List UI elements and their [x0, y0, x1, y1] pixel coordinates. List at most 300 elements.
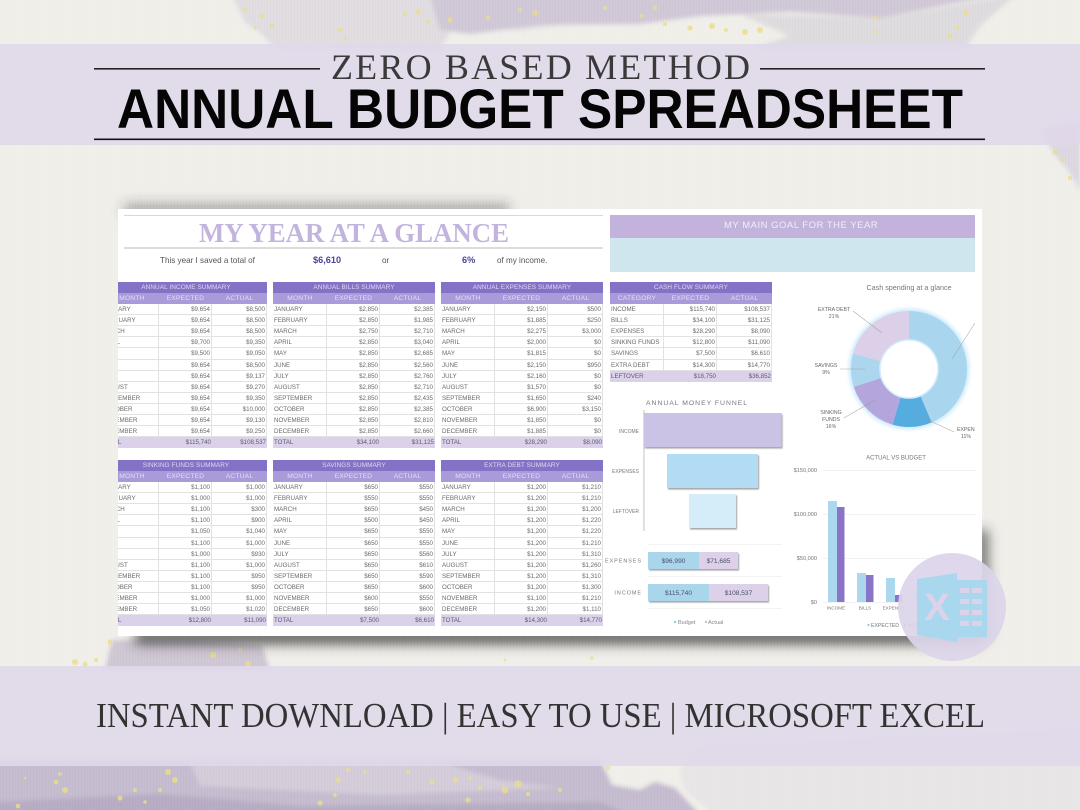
table: sinking funds summary: $930	[251, 551, 265, 558]
table: extra debt summary: FEBRUARY	[442, 495, 476, 502]
subtitle rule right	[760, 68, 985, 70]
table: annual expenses summary: $500	[587, 306, 601, 313]
table: annual expenses summary: EXPECTED	[503, 295, 540, 302]
table: extra debt summary: SEPTEMBER	[442, 573, 480, 580]
stacked bars: income and expenses, budget vs actual	[605, 544, 782, 626]
table: annual income summary: EXPECTED	[167, 295, 204, 302]
table: cash flow summary: $14,770	[748, 362, 770, 369]
table: annual bills summary: SEPTEMBER	[274, 395, 312, 402]
legend: budget and actual: Actual	[708, 620, 723, 626]
table: annual expenses summary: APRIL	[442, 339, 460, 346]
table: extra debt summary: MAY	[442, 528, 455, 535]
table: sinking funds summary: ACTUAL	[226, 473, 253, 480]
table: annual expenses summary: ACTUAL	[562, 295, 589, 302]
table: annual expenses summary: $3,000	[582, 328, 601, 335]
table: cash flow summary: EXTRA DEBT	[611, 362, 650, 369]
table: annual expenses summary: $0	[594, 339, 601, 346]
table: cash flow summary: BILLS	[611, 317, 628, 324]
table: annual expenses summary: $1,815	[527, 350, 546, 357]
donut title: Cash spending at a glance	[866, 283, 952, 292]
table: extra debt summary: JANUARY	[442, 484, 471, 491]
table: savings summary: $650	[364, 562, 378, 569]
table: annual income summary: $9,654	[191, 428, 210, 435]
table: savings summary: MONTH	[287, 473, 313, 480]
table: annual bills summary: $2,850	[359, 362, 378, 369]
stacked bars: income and expenses, budget vs actual: $71,685	[707, 558, 731, 565]
table: annual expenses summary: AUGUST	[442, 384, 468, 391]
donut chart: cash spending at a glance: 16%	[826, 424, 837, 430]
title rule bottom	[94, 138, 985, 140]
table: extra debt summary: ACTUAL	[562, 473, 589, 480]
table: cash flow summary: INCOME	[611, 306, 636, 313]
table: annual bills summary: APRIL	[274, 339, 292, 346]
table: sinking funds summary: $1,000	[191, 495, 210, 502]
table: extra debt summary: $1,200	[582, 506, 601, 513]
table: sinking funds summary: $1,100	[191, 562, 210, 569]
table: sinking funds summary: $1,100	[191, 540, 210, 547]
table: annual bills summary: JUNE	[274, 362, 290, 369]
table: annual expenses summary: $1,650	[527, 395, 546, 402]
table: cash flow summary: $11,090	[748, 339, 770, 346]
table: annual bills summary: ACTUAL	[394, 295, 421, 302]
table: annual income summary	[118, 282, 267, 448]
table: sinking funds summary: $1,100	[191, 584, 210, 591]
table: extra debt summary: $1,200	[527, 562, 546, 569]
stacked bars: income and expenses, budget vs actual: $115,740	[665, 590, 692, 597]
legend: expected and actual: EXPECTED	[871, 623, 899, 629]
table: annual expenses summary: $0	[594, 384, 601, 391]
table: annual bills summary: $2,850	[359, 417, 378, 424]
table: cash flow summary: $31,125	[748, 317, 770, 324]
table: annual bills summary: $2,435	[414, 395, 433, 402]
table: savings summary: $7,500	[360, 617, 379, 624]
table: savings summary: MARCH	[274, 506, 297, 513]
table: cash flow summary: $108,537	[744, 306, 770, 313]
table: extra debt summary: $1,200	[527, 584, 546, 591]
table: annual expenses summary: $28,290	[525, 439, 547, 446]
table: extra debt summary: JUNE	[442, 540, 458, 547]
table: savings summary: $560	[419, 551, 433, 558]
table: sinking funds summary: $12,800	[189, 617, 211, 624]
table: sinking funds summary: $1,050	[191, 606, 210, 613]
main goal panel: MY MAIN GOAL FOR THE YEAR	[724, 220, 878, 231]
donut chart: cash spending at a glance: 9%	[822, 370, 830, 376]
main goal panel	[610, 215, 975, 272]
bar chart: actual vs budget: $50,000	[797, 556, 817, 562]
table: annual bills summary: JANUARY	[274, 306, 303, 313]
table: savings summary: $450	[419, 517, 433, 524]
table: sinking funds summary: $1,100	[191, 484, 210, 491]
table: savings summary: $550	[364, 495, 378, 502]
table: annual expenses summary: $0	[594, 373, 601, 380]
table: savings summary: $650	[364, 551, 378, 558]
table: annual bills summary: $2,750	[359, 328, 378, 335]
table: annual expenses summary: JULY	[442, 373, 457, 380]
legend: budget and actual: Budget	[678, 620, 696, 626]
table: savings summary: $650	[364, 573, 378, 580]
table: extra debt summary: $1,200	[527, 517, 546, 524]
table: cash flow summary: EXPECTED	[672, 295, 709, 302]
table: savings summary: $650	[364, 540, 378, 547]
table: extra debt summary: $1,200	[527, 484, 546, 491]
table: annual expenses summary: MAY	[442, 350, 455, 357]
table: sinking funds summary: $900	[251, 517, 265, 524]
donut chart: cash spending at a glance: SAVINGS	[815, 363, 838, 369]
table: extra debt summary: $1,200	[527, 540, 546, 547]
table: extra debt summary: $1,210	[582, 540, 601, 547]
table: annual expenses summary: $240	[587, 395, 601, 402]
table: annual bills summary	[273, 282, 435, 448]
table: annual income summary: $9,654	[191, 373, 210, 380]
table: annual bills summary: $2,710	[414, 328, 433, 335]
table: savings summary: $550	[419, 484, 433, 491]
table: extra debt summary: JULY	[442, 551, 457, 558]
main title: ANNUAL BUDGET SPREADSHEET	[117, 77, 963, 140]
table: annual bills summary: MONTH	[287, 295, 313, 302]
table: annual income summary: $9,654	[191, 362, 210, 369]
table: sinking funds summary: $1,000	[191, 551, 210, 558]
table: annual expenses summary: $1,885	[527, 317, 546, 324]
bar chart: actual vs budget: $100,000	[794, 512, 817, 518]
table: annual expenses summary: $950	[587, 362, 601, 369]
table: annual bills summary: JULY	[274, 373, 289, 380]
table: annual expenses summary: $1,850	[527, 417, 546, 424]
table: extra debt summary: MONTH	[455, 473, 481, 480]
table: annual expenses summary: JUNE	[442, 362, 458, 369]
table: annual expenses summary: $1,570	[527, 384, 546, 391]
table: annual expenses summary: JANUARY	[442, 306, 471, 313]
table: cash flow summary: $14,300	[693, 362, 715, 369]
table: savings summary: FEBRUARY	[274, 495, 308, 502]
table: annual income summary: $9,654	[191, 417, 210, 424]
table: annual bills summary: $2,660	[414, 428, 433, 435]
table: cash flow summary: EXPENSES	[611, 328, 644, 335]
table: cash flow summary: $6,610	[751, 350, 770, 357]
table: annual bills summary: $2,760	[414, 373, 433, 380]
table: annual income summary: $9,270	[246, 384, 265, 391]
table: savings summary: SAVINGS SUMMARY	[322, 462, 386, 469]
donut chart: cash spending at a glance: 21%	[829, 314, 840, 320]
table: sinking funds summary: $1,100	[191, 517, 210, 524]
feature tagline: INSTANT DOWNLOAD | EASY TO USE | MICROSOFT EXCEL	[96, 696, 985, 735]
table: extra debt summary: $1,260	[582, 562, 601, 569]
funnel title: ANNUAL MONEY FUNNEL	[646, 400, 748, 407]
table: annual bills summary: MAY	[274, 350, 287, 357]
table: extra debt summary: $1,300	[582, 584, 601, 591]
table: extra debt summary: DECEMBER	[442, 606, 477, 613]
table: annual income summary: $9,654	[191, 306, 210, 313]
table: extra debt summary: $1,200	[527, 528, 546, 535]
table: annual expenses summary: $2,150	[527, 306, 546, 313]
table: annual bills summary: $2,385	[414, 306, 433, 313]
table: savings summary: $650	[364, 506, 378, 513]
table: cash flow summary: SAVINGS	[611, 350, 638, 357]
table: savings summary: $6,610	[415, 617, 434, 624]
funnel chart: annual money funnel	[612, 400, 782, 531]
table: annual bills summary: $1,985	[414, 317, 433, 324]
subtitle: zero based method: ZERO BASED METHOD	[331, 47, 750, 87]
donut chart: cash spending at a glance: 11%	[961, 434, 971, 440]
table: annual income summary: $9,130	[246, 417, 265, 424]
table: savings summary: $600	[419, 584, 433, 591]
table: sinking funds summary: $1,000	[246, 540, 265, 547]
table: annual bills summary: AUGUST	[274, 384, 300, 391]
table: extra debt summary: $1,200	[527, 606, 546, 613]
table: sinking funds summary: EXPECTED	[167, 473, 204, 480]
banner band	[0, 44, 1080, 145]
table: annual expenses summary: $0	[594, 350, 601, 357]
table: annual income summary: $9,137	[246, 373, 265, 380]
table: savings summary: JULY	[274, 551, 289, 558]
table: extra debt summary: $1,100	[527, 595, 546, 602]
table: extra debt summary: AUGUST	[442, 562, 468, 569]
subtitle rule left	[94, 68, 320, 70]
icon: microsoft excel badge: X	[924, 587, 950, 629]
table: sinking funds summary: $1,100	[191, 573, 210, 580]
table: sinking funds summary: $1,000	[246, 595, 265, 602]
table: extra debt summary: $1,220	[582, 517, 601, 524]
table: savings summary	[273, 460, 435, 626]
table: extra debt summary: $1,310	[582, 551, 601, 558]
table: extra debt summary: $1,110	[583, 606, 601, 613]
table: annual bills summary: OCTOBER	[274, 406, 304, 413]
table: savings summary: $500	[364, 517, 378, 524]
table: annual expenses summary: MONTH	[455, 295, 481, 302]
table: annual expenses summary: $8,090	[583, 439, 602, 446]
table: cash flow summary: $28,290	[693, 328, 715, 335]
table: savings summary: ACTUAL	[394, 473, 421, 480]
table: cash flow summary: $115,740	[690, 306, 715, 313]
table: annual bills summary: ANNUAL BILLS SUMMARY	[313, 284, 395, 291]
table: savings summary: MAY	[274, 528, 287, 535]
table: annual bills summary: $2,850	[359, 350, 378, 357]
table: sinking funds summary: $950	[251, 584, 265, 591]
table: extra debt summary: APRIL	[442, 517, 460, 524]
sheet heading: my year at a glance	[124, 215, 603, 249]
table: annual bills summary: $2,850	[359, 306, 378, 313]
table: sinking funds summary: $1,000	[246, 484, 265, 491]
funnel chart: annual money funnel: EXPENSES	[612, 469, 640, 475]
bar chart title: ACTUAL VS BUDGET	[866, 456, 926, 462]
table: annual bills summary: TOTAL	[274, 439, 293, 446]
table: annual income summary: $115,740	[186, 439, 211, 446]
table: sinking funds summary: $950	[251, 573, 265, 580]
donut chart: cash spending at a glance: FUNDS	[822, 417, 840, 423]
table: annual bills summary: $2,850	[359, 317, 378, 324]
table: annual expenses summary	[441, 282, 603, 448]
table: sinking funds summary	[118, 460, 267, 626]
table: annual expenses summary: NOVEMBER	[442, 417, 477, 424]
stacked bars: income and expenses, budget vs actual: INCOME	[614, 590, 642, 596]
table: extra debt summary: $1,210	[582, 484, 601, 491]
table: annual bills summary: $2,850	[359, 428, 378, 435]
table: savings summary: $650	[364, 484, 378, 491]
table: annual expenses summary: $2,000	[527, 339, 546, 346]
table: extra debt summary: EXTRA DEBT SUMMARY	[484, 462, 560, 469]
table: annual income summary: $9,654	[191, 317, 210, 324]
table: savings summary: $550	[419, 495, 433, 502]
table: savings summary: $650	[364, 528, 378, 535]
table: sinking funds summary: $1,040	[246, 528, 265, 535]
table: annual bills summary: $2,385	[414, 406, 433, 413]
table: annual income summary: MONTH	[119, 295, 145, 302]
table: extra debt summary: $1,200	[527, 506, 546, 513]
table: sinking funds summary: $1,000	[246, 495, 265, 502]
table: annual expenses summary: OCTOBER	[442, 406, 472, 413]
table: sinking funds summary: $1,000	[246, 562, 265, 569]
savings sentence: 6%	[462, 255, 475, 265]
table: annual expenses summary: SEPTEMBER	[442, 395, 480, 402]
table: cash flow summary: $7,500	[696, 350, 715, 357]
table: annual income summary: $108,537	[240, 439, 266, 446]
table: extra debt summary: EXPECTED	[503, 473, 540, 480]
table: cash flow summary: CATEGORY	[618, 295, 656, 302]
table: annual expenses summary: TOTAL	[442, 439, 461, 446]
bar chart: actual vs budget: INCOME	[827, 606, 845, 610]
table: annual income summary: $8,500	[246, 306, 265, 313]
table: cash flow summary: $8,090	[751, 328, 770, 335]
table: annual bills summary: $2,850	[359, 339, 378, 346]
savings sentence: of my income.	[497, 256, 547, 265]
table: annual bills summary: $2,850	[359, 384, 378, 391]
table: annual income summary: $9,350	[246, 339, 265, 346]
bar chart: actual vs budget: BILLS	[859, 606, 871, 610]
table: extra debt summary: $1,210	[582, 495, 601, 502]
table: annual expenses summary: $2,160	[527, 373, 546, 380]
table: annual bills summary: FEBRUARY	[274, 317, 308, 324]
table: annual bills summary: $31,125	[412, 439, 434, 446]
table: savings summary: $600	[364, 595, 378, 602]
table: extra debt summary: $1,200	[527, 573, 546, 580]
table: annual bills summary: MARCH	[274, 328, 297, 335]
table: savings summary: $650	[364, 606, 378, 613]
legend: expected and actual	[867, 623, 929, 629]
table: annual income summary: $8,500	[246, 362, 265, 369]
table: cash flow summary: ACTUAL	[731, 295, 758, 302]
table: annual income summary: ACTUAL	[226, 295, 253, 302]
table: extra debt summary: MARCH	[442, 506, 465, 513]
table: annual income summary: $9,500	[191, 350, 210, 357]
bar chart: actual vs budget: $150,000	[794, 468, 817, 474]
table: annual income summary: $9,654	[191, 384, 210, 391]
bar chart: actual vs budget: EXPENSES	[883, 606, 907, 610]
table: sinking funds summary: $1,050	[191, 528, 210, 535]
table: annual bills summary: NOVEMBER	[274, 417, 309, 424]
stacked bars: income and expenses, budget vs actual: $96,990	[662, 558, 686, 565]
table: annual bills summary: $2,685	[414, 350, 433, 357]
table: savings summary: $450	[419, 506, 433, 513]
table: extra debt summary: $1,310	[582, 573, 601, 580]
donut chart: cash spending at a glance	[815, 283, 986, 440]
table: extra debt summary: TOTAL	[442, 617, 461, 624]
table: annual expenses summary: FEBRUARY	[442, 317, 476, 324]
table: savings summary: DECEMBER	[274, 606, 309, 613]
table: annual expenses summary: $250	[587, 317, 601, 324]
table: cash flow summary: $12,800	[693, 339, 715, 346]
table: sinking funds summary: $1,020	[246, 606, 265, 613]
stacked bars: income and expenses, budget vs actual: $108,537	[725, 590, 753, 597]
table: annual expenses summary: MARCH	[442, 328, 465, 335]
table: annual bills summary: $2,560	[414, 362, 433, 369]
table: annual income summary: $9,700	[191, 339, 210, 346]
table: annual bills summary: $2,710	[414, 384, 433, 391]
table: annual bills summary: $3,040	[414, 339, 433, 346]
table: extra debt summary: $14,300	[525, 617, 547, 624]
legend: expected and actual: ACTUAL	[908, 623, 929, 629]
table: extra debt summary: $1,210	[582, 595, 601, 602]
table: savings summary: APRIL	[274, 517, 292, 524]
table: annual expenses summary: $0	[594, 417, 601, 424]
table: savings summary: $550	[419, 595, 433, 602]
table: annual income summary: $9,654	[191, 328, 210, 335]
bottom band	[0, 666, 1080, 766]
savings sentence: This year I saved a total of	[160, 256, 255, 265]
stacked bars: income and expenses, budget vs actual: EXPENSES	[605, 558, 642, 564]
table: extra debt summary: $1,220	[582, 528, 601, 535]
table: annual expenses summary: $3,150	[582, 406, 601, 413]
table: annual bills summary: $2,850	[359, 395, 378, 402]
bar chart: actual vs budget	[794, 456, 976, 629]
table: savings summary: $650	[364, 584, 378, 591]
table: savings summary: AUGUST	[274, 562, 300, 569]
savings sentence	[160, 255, 547, 265]
table: annual income summary: $9,654	[191, 395, 210, 402]
table: savings summary: NOVEMBER	[274, 595, 309, 602]
savings sentence: $6,610	[313, 255, 341, 265]
donut chart: cash spending at a glance: EXTRA DEBT	[818, 307, 851, 313]
table: savings summary: TOTAL	[274, 617, 293, 624]
savings sentence: or	[382, 256, 389, 265]
table: cash flow summary: $36,852	[749, 373, 771, 380]
bar chart: actual vs budget: $0	[811, 600, 817, 606]
table: annual bills summary: DECEMBER	[274, 428, 309, 435]
table: extra debt summary: $1,200	[527, 495, 546, 502]
table: annual income summary: $8,500	[246, 328, 265, 335]
table: cash flow summary: $34,100	[693, 317, 715, 324]
legend: budget and actual	[674, 620, 723, 626]
table: savings summary: JUNE	[274, 540, 290, 547]
table: annual bills summary: $2,850	[359, 406, 378, 413]
table: sinking funds summary: MONTH	[119, 473, 145, 480]
table: annual income summary: ANNUAL INCOME SUMMARY	[141, 284, 231, 291]
table: sinking funds summary: $11,090	[244, 617, 266, 624]
table: annual bills summary: EXPECTED	[335, 295, 372, 302]
table: cash flow summary: CASH FLOW SUMMARY	[654, 284, 728, 291]
donut chart: cash spending at a glance: SINKING	[820, 410, 842, 416]
table: annual expenses summary: $1,885	[527, 428, 546, 435]
table: cash flow summary: $18,750	[694, 373, 716, 380]
table: annual income summary: $9,654	[191, 406, 210, 413]
table: extra debt summary: $1,200	[527, 551, 546, 558]
table: annual income summary: $10,000	[243, 406, 265, 413]
table: annual expenses summary: $2,150	[527, 362, 546, 369]
table: extra debt summary: OCTOBER	[442, 584, 472, 591]
table: annual bills summary: $34,100	[357, 439, 379, 446]
funnel chart: annual money funnel: LEFTOVER	[613, 509, 639, 515]
table: savings summary: $610	[419, 562, 433, 569]
table: savings summary: EXPECTED	[335, 473, 372, 480]
table: sinking funds summary: $300	[251, 506, 265, 513]
table: annual expenses summary: $0	[594, 428, 601, 435]
table: savings summary: JANUARY	[274, 484, 303, 491]
table: savings summary: SEPTEMBER	[274, 573, 312, 580]
table: cash flow summary: SINKING FUNDS	[611, 339, 659, 346]
table: extra debt summary	[441, 460, 603, 626]
table: annual expenses summary: $6,900	[527, 406, 546, 413]
table: savings summary: OCTOBER	[274, 584, 304, 591]
table: sinking funds summary: $1,100	[191, 506, 210, 513]
table: annual bills summary: $2,810	[414, 417, 433, 424]
